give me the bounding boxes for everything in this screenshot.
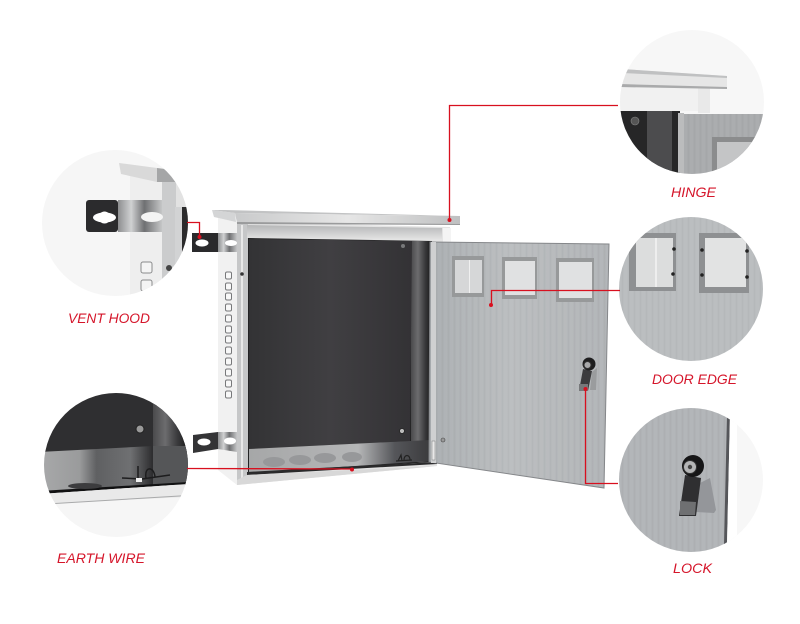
vent hood: side panel xyxy=(130,176,162,301)
label: hinge: HINGE xyxy=(671,184,717,200)
hinge: door edge xyxy=(678,113,684,174)
callout circle: lock xyxy=(619,408,730,552)
earth wire: screw xyxy=(136,425,144,433)
vent hood: frame xyxy=(162,182,176,279)
earth wire: metal floor xyxy=(40,446,153,492)
left side panel xyxy=(218,218,237,485)
callout circle: vent hood xyxy=(42,150,190,302)
lock: door face xyxy=(615,405,728,555)
door lock xyxy=(579,358,597,391)
interior floor xyxy=(249,440,431,473)
door edge: frame screws xyxy=(671,247,749,279)
front frame xyxy=(237,222,450,485)
leader: hinge xyxy=(448,106,618,222)
cabinet body xyxy=(192,210,460,485)
cabinet door xyxy=(429,242,609,488)
door edges xyxy=(429,242,609,488)
hood xyxy=(212,210,460,225)
interior opening xyxy=(248,238,432,474)
hinge: dark interior xyxy=(620,111,680,173)
vent hood: screw xyxy=(166,265,172,271)
interior screws xyxy=(400,244,405,434)
vent hood: lip xyxy=(119,163,157,182)
interior back panel xyxy=(249,239,412,449)
label: earth wire: EARTH WIRE xyxy=(57,550,146,566)
lock: door edge xyxy=(724,415,730,545)
door hinge edge xyxy=(431,242,436,463)
callout circle: door edge xyxy=(619,217,763,361)
callout circle: hinge xyxy=(620,69,763,174)
earth wire: lip xyxy=(40,484,188,503)
lock: handle xyxy=(679,475,701,516)
vent hood: bracket xyxy=(86,200,118,232)
leader: lock xyxy=(584,387,618,484)
side vent slots xyxy=(226,272,232,398)
leader: earth wire xyxy=(187,468,354,472)
earth wire: dark panel xyxy=(40,390,190,452)
floor knockouts xyxy=(263,452,362,467)
earth wire: right channel xyxy=(153,403,188,485)
floor gap xyxy=(247,462,437,475)
label: lock: LOCK xyxy=(673,560,713,576)
meter window 1 xyxy=(452,256,484,297)
label: vent hood: VENT HOOD xyxy=(68,310,150,326)
bottom lip xyxy=(237,466,443,485)
door screw xyxy=(441,438,445,442)
mounting bracket: bottom xyxy=(193,432,237,453)
hinge: meter window xyxy=(712,137,755,172)
top inner band xyxy=(247,225,442,239)
hinge: hood lip xyxy=(622,73,727,87)
lock: handle shadow xyxy=(696,478,716,513)
mounting bracket: top xyxy=(192,233,237,252)
frame screw xyxy=(240,272,244,276)
earth wire: gap xyxy=(48,482,186,494)
meter window 3 xyxy=(556,258,594,302)
earth wire: terminal xyxy=(122,466,170,479)
earth wire terminal xyxy=(396,455,412,461)
label: door edge: DOOR EDGE xyxy=(652,371,738,387)
leader: vent hood xyxy=(187,222,202,239)
door edge: right window xyxy=(699,233,749,293)
door edge: left window xyxy=(629,233,676,291)
vent hood: slots xyxy=(141,262,152,273)
lock: cylinder xyxy=(682,455,704,477)
interior right channel xyxy=(411,241,431,462)
door hinge xyxy=(432,441,435,460)
hinge: door face xyxy=(684,114,763,174)
door face xyxy=(429,242,609,488)
leader: door edge xyxy=(489,290,620,307)
hinge: frame and post xyxy=(618,87,698,111)
meter window 2 xyxy=(502,257,537,299)
callout circle: earth wire xyxy=(40,390,190,537)
